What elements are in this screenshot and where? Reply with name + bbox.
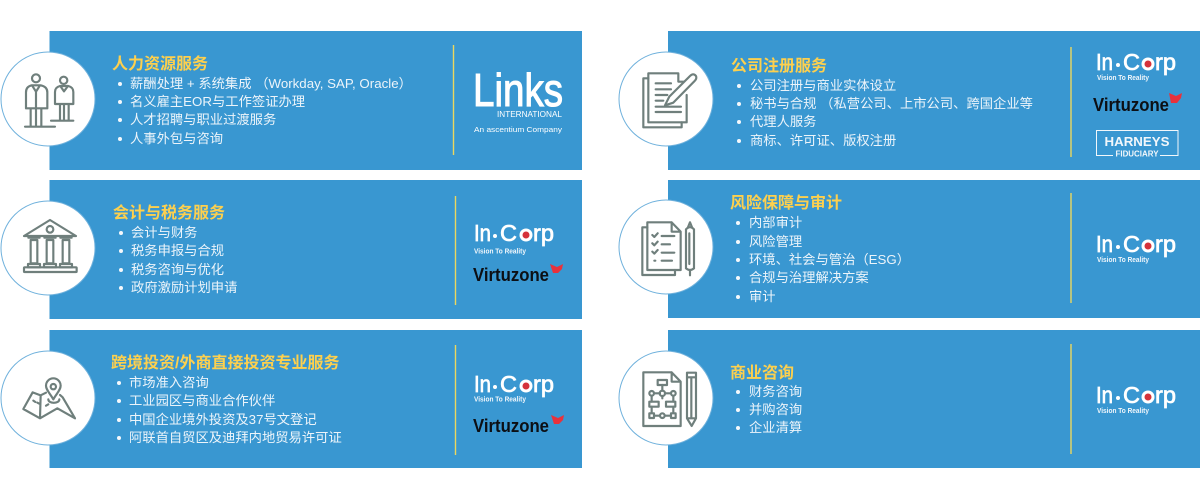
heading: 风险保障与审计 (730, 193, 842, 212)
logo: InCorp (1096, 382, 1176, 415)
logo: InCorp: rp (1155, 231, 1176, 257)
logo: InCorp: C (500, 220, 517, 246)
logo: Harneys Fiduciary (1096, 130, 1178, 158)
card background (50, 180, 582, 319)
logo: InCorp: Vision To Reality (474, 396, 526, 404)
service list: 环境、社会与管治（ESG） (749, 252, 910, 267)
logo: InCorp (474, 371, 554, 404)
logo: InCorp: Vision To Reality (474, 248, 526, 256)
icon: flowchart document with pencil (619, 351, 713, 445)
logo: Harneys Fiduciary: FIDUCIARY (1116, 150, 1159, 158)
icon: checklist with pen (619, 200, 713, 294)
service list: 财务咨询 (749, 384, 802, 399)
heading: 跨境投资/外商直接投资专业服务 (111, 353, 339, 372)
logo: Virtuzone: Virtuzone (473, 416, 549, 436)
heading: 会计与税务服务 (113, 203, 225, 222)
panel: 跨境投资/外商直接投资专业服务 (1, 330, 582, 468)
icon: document with pen (619, 52, 713, 146)
logo: Links International: An ascentium Company (474, 125, 562, 134)
service list: 风险管理 (749, 234, 802, 249)
service list: 秘书与合规 （私营公司、上市公司、跨国企业等 (750, 95, 1033, 111)
logo: Links International (473, 64, 563, 134)
service list (119, 225, 237, 295)
heading: 商业咨询 (730, 363, 794, 382)
logo: InCorp: rp (533, 220, 554, 246)
service list (117, 374, 342, 445)
panel: 商业咨询 (619, 330, 1200, 468)
logo: InCorp: rp (1155, 382, 1176, 408)
service list (736, 384, 802, 435)
icon: classical bank building (1, 201, 95, 295)
icon: map with location pin (1, 351, 95, 445)
service list: 政府激励计划申请 (131, 280, 237, 295)
logo: Links International: Links (473, 64, 563, 116)
logo: InCorp: rp (1155, 49, 1176, 75)
logo: InCorp: C (1123, 382, 1140, 408)
service list: 合规与治理解决方案 (749, 270, 869, 285)
service list: 中国企业境外投资及37号文登记 (129, 411, 317, 427)
service list: 工业园区与商业合作伙伴 (129, 393, 275, 408)
logo: InCorp: C (1123, 49, 1140, 75)
logo: InCorp (1096, 49, 1176, 82)
service list: 公司注册与商业实体设立 (750, 78, 896, 93)
service list: 代理人服务 (750, 114, 816, 129)
logo: InCorp (1096, 231, 1176, 264)
service list (737, 78, 1033, 148)
card background (50, 330, 582, 468)
heading: 人力资源服务 (112, 54, 208, 73)
panel: 风险保障与审计 (619, 180, 1200, 318)
service list: 税务咨询与优化 (131, 262, 224, 277)
logo: InCorp (474, 220, 554, 256)
card background (668, 180, 1200, 318)
service list: 商标、许可证、版权注册 (750, 132, 896, 148)
card background (668, 330, 1200, 468)
service list: 阿联首自贸区及迪拜内地贸易许可证 (129, 430, 342, 445)
service list: 市场准入咨询 (129, 374, 209, 390)
panel: 公司注册服务 (619, 31, 1200, 170)
service list: 税务申报与合规 (131, 243, 224, 258)
logo: InCorp: C (1123, 231, 1140, 257)
service list: 并购咨询 (749, 402, 802, 417)
logo: InCorp: Vision To Reality (1097, 257, 1149, 264)
heading: 公司注册服务 (731, 56, 827, 75)
service list: 审计 (749, 289, 776, 304)
logo: InCorp: Vision To Reality (1097, 408, 1149, 415)
card background (668, 31, 1200, 170)
service list: 内部审计 (749, 215, 802, 230)
logo: Links International: INTERNATIONAL (497, 109, 562, 119)
logo: InCorp: In (1096, 231, 1113, 257)
service list (736, 215, 910, 304)
logo: InCorp: Vision To Reality (1097, 75, 1149, 82)
logo: InCorp: In (1096, 382, 1113, 408)
service list (118, 76, 412, 146)
logo: InCorp: rp (533, 371, 554, 397)
logo: Virtuzone: Virtuzone (473, 265, 549, 285)
service list: 人事外包与咨询 (130, 131, 223, 146)
service list: 企业清算 (749, 419, 802, 435)
service list: 会计与财务 (131, 225, 197, 240)
logo: InCorp: In (474, 220, 491, 246)
panel: 人力资源服务 (1, 31, 582, 170)
panel: 会计与税务服务 (1, 180, 582, 319)
service list: 人才招聘与职业过渡服务 (130, 112, 276, 127)
icon: two business people (1, 52, 95, 146)
logo: InCorp: C (500, 371, 517, 397)
service list: 薪酬处理 + 系统集成 （Workday, SAP, Oracle） (130, 76, 412, 91)
service list: 名义雇主EOR与工作签证办理 (130, 93, 305, 109)
logo: Harneys Fiduciary: HARNEYS (1104, 134, 1170, 149)
logo: Virtuzone: Virtuzone (1093, 95, 1169, 115)
logo: InCorp: In (1096, 49, 1113, 75)
card background (50, 31, 582, 170)
logo: InCorp: In (474, 371, 491, 397)
